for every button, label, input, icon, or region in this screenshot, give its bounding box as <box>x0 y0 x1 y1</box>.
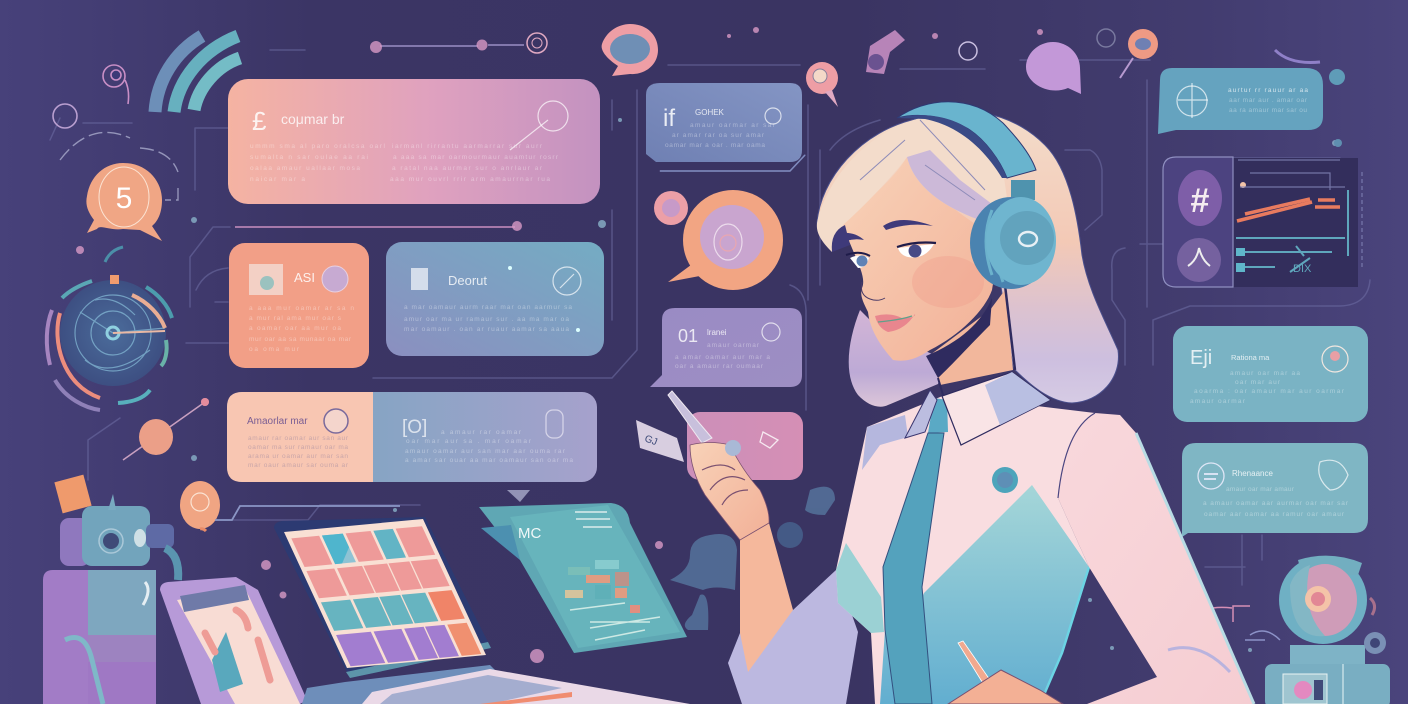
hand holding pen: GJ <box>643 433 659 448</box>
laptop base and keyboard <box>302 665 690 704</box>
panel: orange card: mur oar aa sa munaar oa mar <box>249 336 352 343</box>
panel: peach and blue split card: a amaur rar oamar <box>441 429 522 436</box>
panel: teal top right card <box>1158 68 1323 134</box>
panel: peach and blue split card <box>227 392 597 482</box>
panel: orange card: a mur ral ama mur oar s <box>249 315 342 322</box>
icon: large orange speech bubble <box>654 190 783 290</box>
panel: orange card: ASI <box>294 270 315 285</box>
panel: dark chart: # <box>1191 182 1210 220</box>
laptop screen grid <box>274 517 491 678</box>
panel: slate card with tail: GOHEK <box>695 108 725 117</box>
panel: teal top right card: aa ra amaur mar sar ou <box>1229 107 1307 114</box>
right robot <box>1265 556 1390 704</box>
panel: large gradient card: a aaa sa mar oarmourmaur auamtur rosrr <box>393 154 559 161</box>
icon: rings top left <box>53 65 129 128</box>
icon: peach planet with line <box>123 398 209 460</box>
panel: teal right card one: amaur oarmar <box>1190 398 1246 405</box>
gauge dial <box>47 247 172 410</box>
hand holding pen <box>636 391 769 540</box>
panel: slate card with tail: oamar mar a oar . mar oama <box>665 142 765 149</box>
icon: wifi arcs top left <box>155 36 240 112</box>
sleeve and cuff of raised arm <box>728 523 858 704</box>
icon: orange speech bubble with numeral <box>60 132 178 241</box>
panel: large gradient card: iarmanl rirrantu aarmarrar sur aurr <box>392 143 543 150</box>
panel: teal top right card: aar mar aur . amar oar <box>1229 97 1308 104</box>
panel: blue card: mar oamaur . oan ar ruaur aamar sa aaua <box>404 326 569 333</box>
panel: blue card <box>386 242 604 356</box>
panel: large gradient card: a ratal naa aurmar sur o anrlaur ar <box>392 165 543 172</box>
headphones <box>897 102 1056 289</box>
panel: teal right card one: amaur oar mar aa <box>1230 370 1300 377</box>
panel: peach and blue split card: Amaorlar mar <box>247 416 308 427</box>
panel: dark chart <box>1163 139 1362 287</box>
panel: large gradient card: aaa mur ouvrl rrir arm amaurrnar rua <box>390 176 550 183</box>
panel: teal right card one <box>1173 326 1368 422</box>
panel: large gradient card: naicar mar a <box>250 176 305 183</box>
panel: orange card: oa oma mur <box>249 346 300 353</box>
tablet <box>160 577 307 704</box>
left robot <box>43 475 178 704</box>
front hair <box>817 117 1008 252</box>
icon: orange speech bubble with numeral: 5 <box>116 182 132 215</box>
card heading: cομmar br <box>281 111 345 127</box>
panel: large gradient card: ummm sma al paro oralcsa oarl <box>250 143 386 150</box>
panel: slate card with tail: ar amar rar oa sur amar <box>672 132 765 139</box>
panel: teal right card two: a amaur oamar aar aurmar oar mar sar <box>1203 500 1349 507</box>
icon: orange pin bubble <box>180 481 400 531</box>
panel: pink card <box>687 412 803 480</box>
pin badge <box>992 467 1018 493</box>
panel: slate card with tail <box>646 83 805 171</box>
panel: peach and blue split card: amaur rar oamar aur san aur <box>248 435 349 442</box>
lower hand with pencil <box>948 641 1063 704</box>
neck and shadow <box>926 285 1015 395</box>
panel: peach and blue split card: mar oaur amaur sar ouma ar <box>248 462 349 469</box>
panel: large gradient card: sumalta n sar oulae aa rai <box>250 154 368 161</box>
panel: lavender card: a amar oamar aur mar a <box>675 354 770 361</box>
panel: teal right card two: amaur oar mar amaur <box>1226 486 1295 493</box>
panel: large gradient card: £ <box>252 106 267 136</box>
panel: peach and blue split card: a amar sar ouar aa mar oamaur san oar ma <box>405 457 573 464</box>
panel: peach and blue split card: oamar ma sur ramaur oar ma <box>248 444 348 451</box>
panel: lavender card <box>650 308 802 387</box>
torso <box>836 395 1254 704</box>
panel: large gradient card <box>228 79 600 204</box>
panel: blue card: amur oar ma ur ramaur sur . aa ma mar oa <box>404 316 569 323</box>
panel: teal right card one: oar mar aur <box>1235 379 1281 386</box>
teal document <box>479 503 687 653</box>
panel: teal right card two: oamar aar oamar aa ramur oar amaur <box>1204 511 1345 518</box>
panel: peach and blue split card: oar mar aur sa . mar oamar <box>406 438 532 445</box>
panel: teal right card two <box>1182 443 1368 537</box>
top row small icons <box>527 24 1345 107</box>
panel: teal right card one: aoarma : oar amaur mar aur oarmar <box>1194 388 1345 395</box>
panel: orange card: a oamar oar aa mur oa <box>249 325 341 332</box>
panel: blue card: Deorut <box>448 273 487 288</box>
panel: peach and blue split card: [O] <box>402 417 427 438</box>
teal document: MC <box>518 525 541 542</box>
panel: peach and blue split card: amaur oamar aur san mar aar ouma rar <box>405 448 566 455</box>
panel: lavender card: 01 <box>678 326 698 346</box>
panel: lavender card: lranei <box>707 328 727 337</box>
panel: orange card: a aaa mur oamar ar sa n <box>249 305 354 312</box>
panel: peach and blue split card: arama ur oamar aur mar san <box>248 453 348 460</box>
tie <box>883 398 948 704</box>
panel: orange card <box>229 243 369 368</box>
back hair <box>817 111 1118 407</box>
panel: slate card with tail: amaur oarmar ar sar <box>690 122 776 129</box>
icon: small blue bubbles lower centre <box>670 487 835 630</box>
collar <box>905 372 1050 445</box>
panel: lavender card: amaur oarmar <box>707 342 760 349</box>
panel: teal right card one: Rationa ma <box>1231 353 1270 362</box>
panel: teal right card one: Eji <box>1190 347 1212 369</box>
panel: large gradient card: oalaa amaur uallaar mosa <box>250 165 360 172</box>
woman illustration <box>636 102 1254 704</box>
panel: blue card: a mar oamaur aurm raar mar oan aarmur sa <box>404 304 572 311</box>
panel: lavender card: oar a amaur rar oumaar <box>675 363 764 370</box>
panel: slate card with tail: if <box>663 105 675 132</box>
panel: teal right card two: Rhenaance <box>1232 469 1273 478</box>
face <box>843 157 1000 361</box>
panel: teal top right card: aurtur rr rauur ar aa <box>1228 87 1308 94</box>
panel: dark chart: DIX <box>1293 263 1312 275</box>
